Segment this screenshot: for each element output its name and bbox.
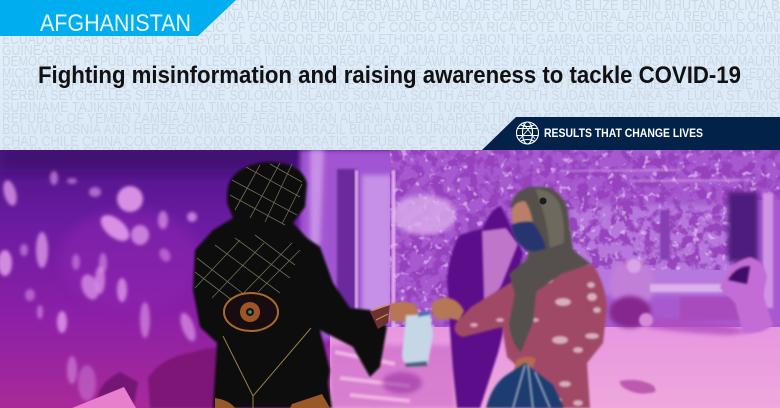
seated figure and bench	[609, 257, 773, 333]
pale house wall and doorway	[300, 150, 400, 340]
banner: results that change lives	[482, 117, 780, 150]
face	[511, 201, 533, 226]
dappled sunlight on the wall	[0, 171, 199, 401]
sleeve cuff bracelet	[370, 305, 390, 329]
sunlit ground	[330, 318, 780, 408]
forearm hand	[432, 298, 464, 321]
shaded wall on the left	[0, 146, 400, 408]
face mask	[511, 222, 546, 251]
lower hand	[513, 356, 536, 372]
garden foliage background	[390, 150, 780, 335]
country tag: Afghanistan: AFGHANISTAN	[40, 10, 191, 37]
headscarf	[509, 187, 591, 352]
hand	[390, 302, 418, 322]
woman in black seen from behind	[193, 162, 418, 408]
blue shopping bag	[486, 363, 564, 408]
woman in purple in the background	[447, 206, 523, 408]
plaid hood and shawl	[195, 163, 302, 310]
embroidered back panel	[224, 293, 278, 331]
banner: results that change lives: RESULTS THAT CHANGE LIVES	[544, 128, 703, 140]
header background with country names	[0, 0, 780, 161]
photo: two women exchanging a face mask, magenta duotone	[0, 146, 780, 408]
woman with blue mask	[432, 187, 607, 408]
patterned dress	[455, 265, 607, 408]
cloth face mask being handed over	[402, 311, 433, 367]
rubble at the foot of the wall	[72, 348, 220, 408]
country tag: Afghanistan	[0, 0, 236, 37]
icon: globe	[516, 122, 538, 144]
